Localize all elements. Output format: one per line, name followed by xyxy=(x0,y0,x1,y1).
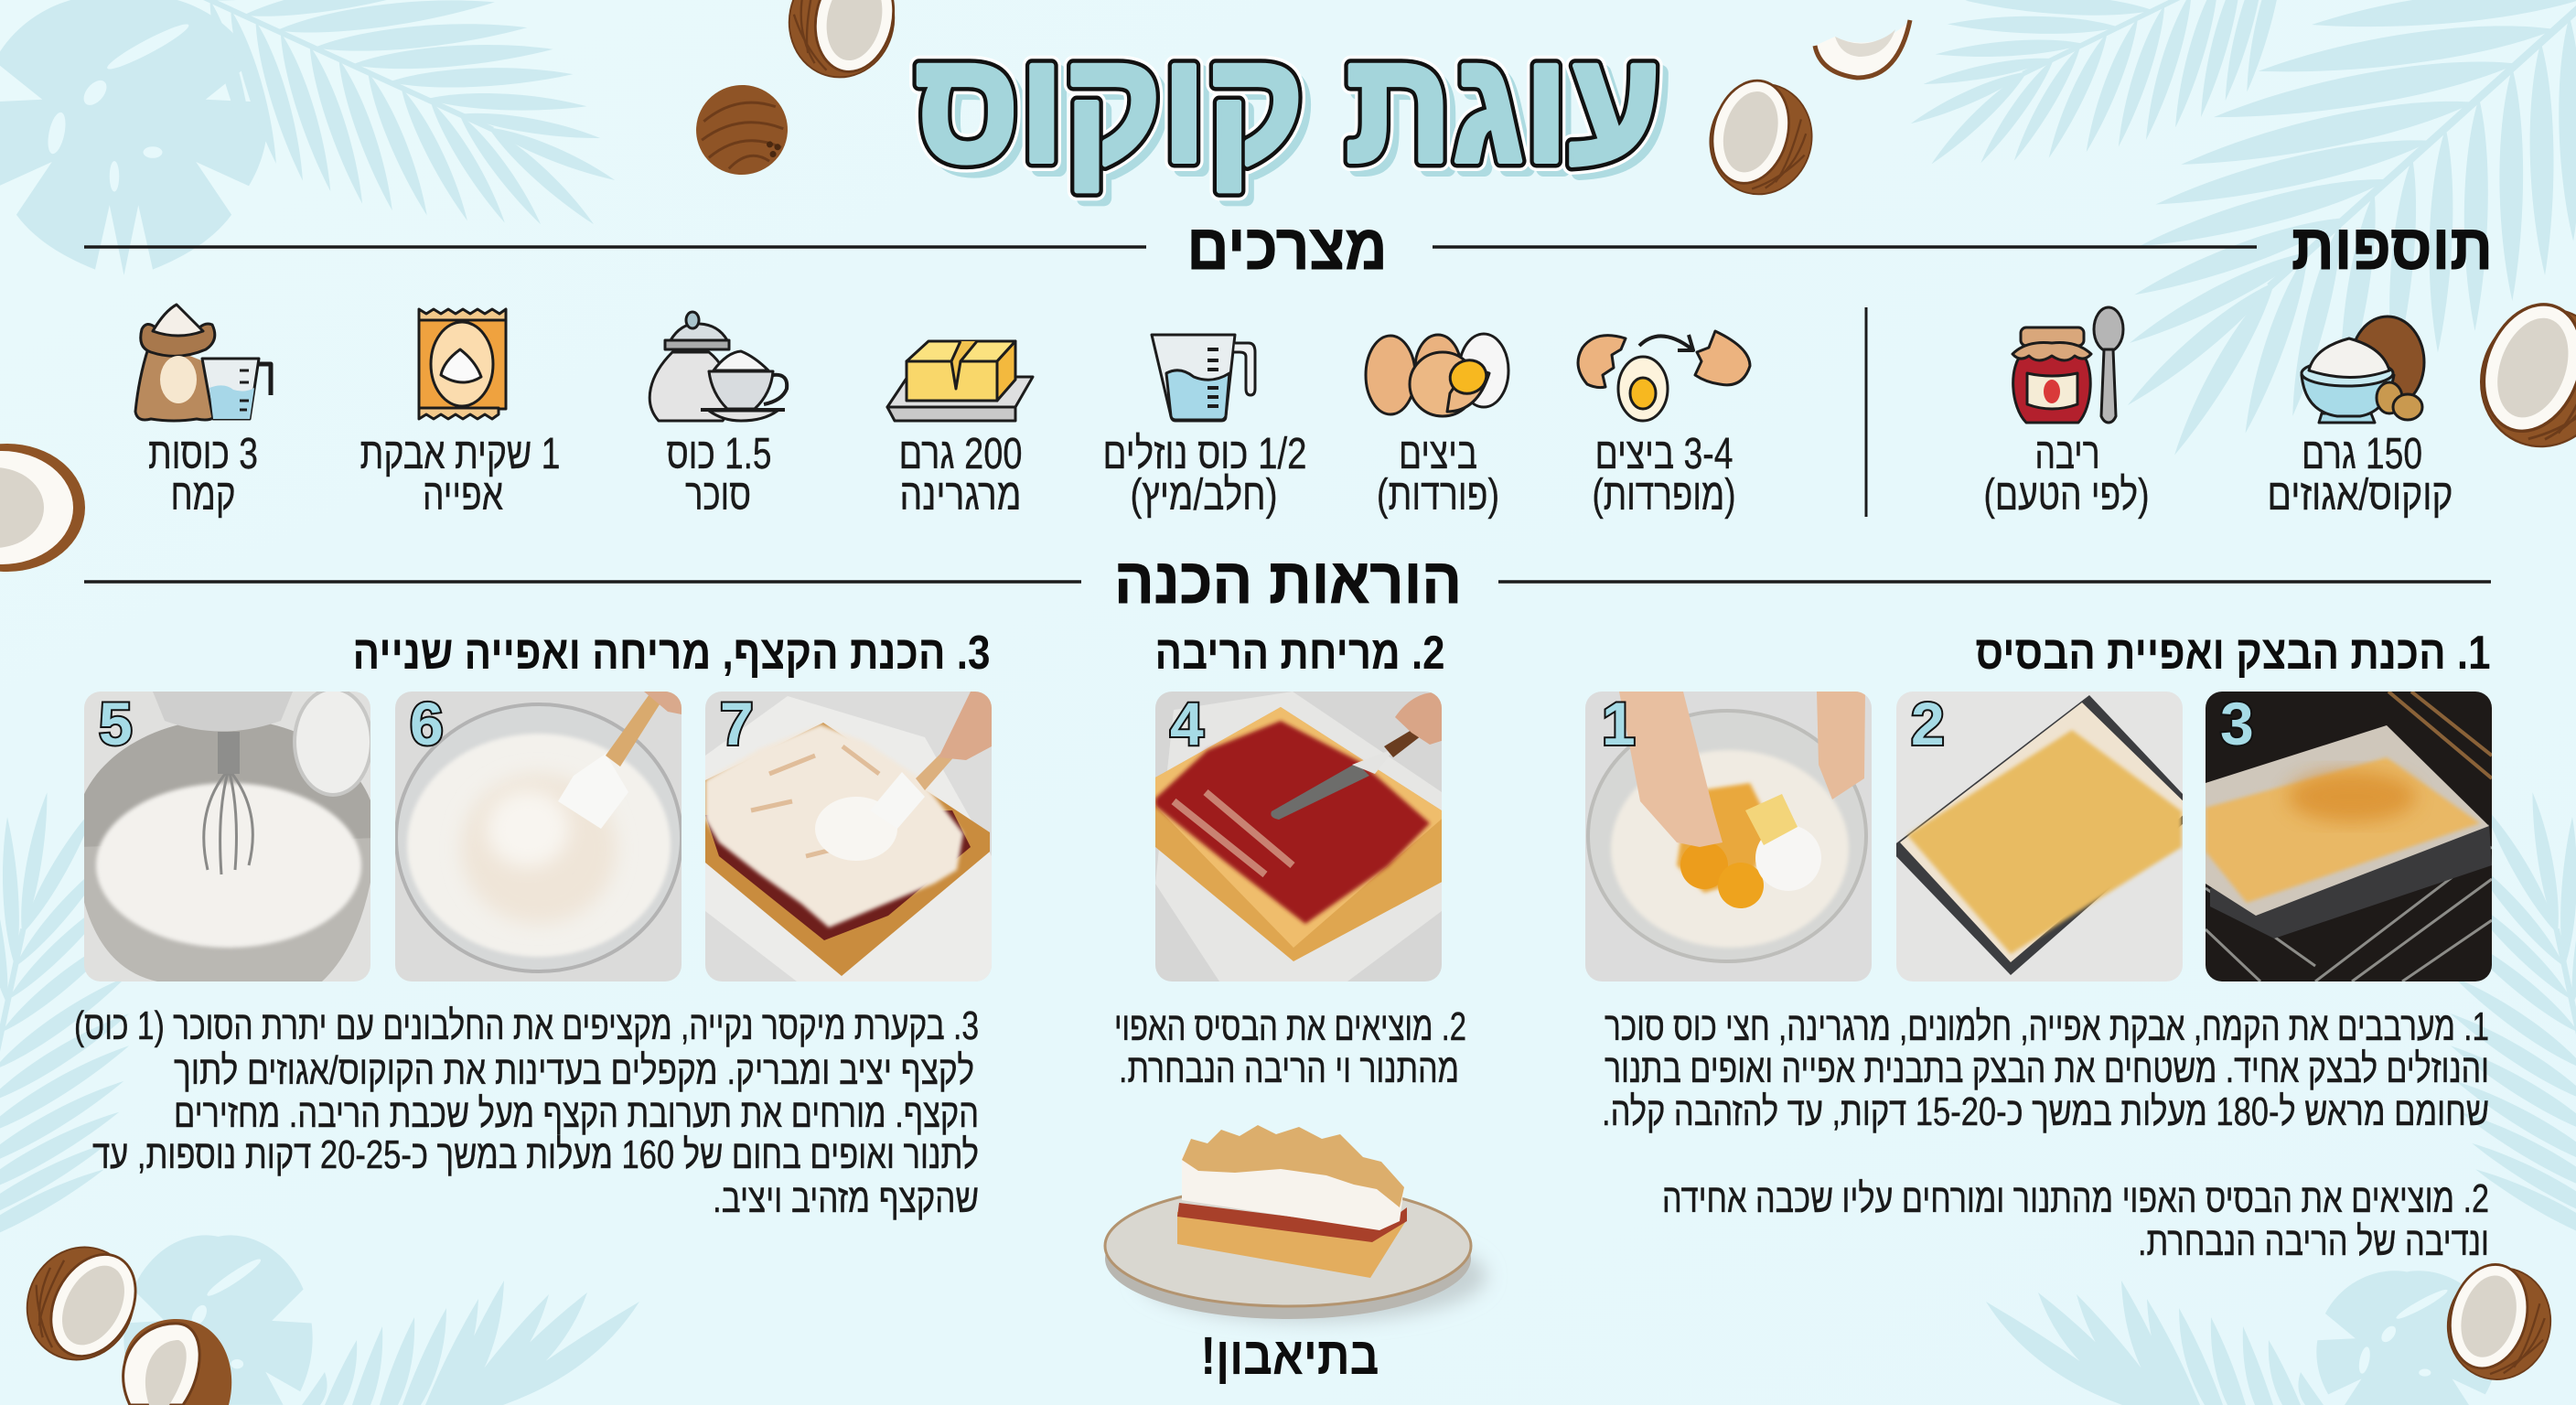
ingredient: baking powder: אפייה xyxy=(423,471,503,520)
title: עוגת קוקוס xyxy=(922,27,1669,202)
ingredient: whole eggs xyxy=(1366,334,1508,520)
ingredient: whole eggs: (פורדות) xyxy=(1377,471,1499,520)
photo 1: mixing the dough: 1 xyxy=(1602,690,1636,757)
photo 1: mixing the dough xyxy=(1585,690,1872,981)
ingredient: baking powder: 1 שקית אבקת xyxy=(360,430,560,478)
divider between extras and ingredients xyxy=(1864,307,1868,517)
photo 2: dough in the pan xyxy=(1889,690,2198,981)
icon: margarine on dish xyxy=(887,341,1033,421)
instructions: step 3 text: לקצף יציב ומבריק. מקפלים בעדינות את הקוקוס/אגוזים לתוך xyxy=(174,1048,974,1093)
ingredient: margarine xyxy=(887,341,1033,520)
extra: coconut or nuts: קוקוס/אגוזים xyxy=(2267,471,2453,520)
extra: jam xyxy=(1983,307,2150,520)
photo 7: spreading the meringue xyxy=(705,690,992,981)
step heading 2: 2. מריחת הריבה xyxy=(1154,627,1445,680)
ingredient: flour: קמח xyxy=(170,471,236,520)
instructions: step 2 text xyxy=(1114,1004,1466,1091)
photo 4: spreading the jam: 4 xyxy=(1170,690,1204,757)
ingredient: separated eggs: (מופרדות) xyxy=(1592,471,1736,520)
ingredient: separated eggs xyxy=(1578,331,1750,520)
ingredient: margarine: מרגרינה xyxy=(900,471,1021,520)
title: עוגת קוקוס xyxy=(915,19,1661,195)
extra: coconut or nuts: 150 גרם xyxy=(2302,430,2422,478)
instructions: step 1 text: שחומם מראש ל-180 מעלות במשך כ-15-20 דקות, עד להזהבה קלה. xyxy=(1602,1089,2489,1134)
section heading: extras: תוספות xyxy=(2292,211,2493,283)
ingredient: margarine: 200 גרם xyxy=(898,430,1023,478)
photo 7: spreading the meringue: 7 xyxy=(720,690,754,757)
instructions: step 2 text: מהתנור וי הריבה הנבחרת. xyxy=(1119,1046,1459,1091)
icon: jam jar and spoon xyxy=(2012,307,2123,423)
ingredient: baking powder xyxy=(360,309,560,520)
photo 6: folding in the coconut xyxy=(395,690,682,981)
photo 5: whipping the egg whites xyxy=(75,689,377,981)
photo 3: baking in the oven: 3 xyxy=(2220,690,2254,757)
instructions: step 3 text: שהקצף מזהיב ויציב. xyxy=(713,1176,979,1221)
closing text: בתיאבון! xyxy=(1200,1326,1379,1386)
ingredient: flour xyxy=(135,305,271,520)
photo 5: whipping the egg whites: 5 xyxy=(99,690,133,757)
photo 3: baking in the oven xyxy=(2206,690,2492,981)
photo: finished cake slice on plate xyxy=(1105,1125,1487,1322)
icon: sugar bowl and cup xyxy=(649,312,787,421)
section heading: preparation: הוראות הכנה xyxy=(1114,545,1462,617)
photo 2: dough in the pan: 2 xyxy=(1911,690,1945,757)
ingredient: sugar: 1.5 כוס xyxy=(666,430,772,478)
ingredient: flour: 3 כוסות xyxy=(148,430,258,478)
title: עוגת קוקוס xyxy=(915,19,1661,195)
instructions: step 3 text: הקצף. מורחים את תערובת הקצף מעל שכבת הריבה. מחזירים xyxy=(174,1091,979,1136)
instructions: step 1 text xyxy=(1602,1004,2489,1264)
ingredient: liquids: 1/2 כוס נוזלים xyxy=(1103,430,1306,478)
step heading 3: 3. הכנת הקצף, מריחה ואפייה שנייה xyxy=(353,627,990,680)
instructions: step 2 text: 2. מוציאים את הבסיס האפוי xyxy=(1114,1004,1466,1049)
ingredient: sugar xyxy=(649,312,787,520)
extra: coconut or nuts xyxy=(2267,316,2453,520)
ingredient: liquids: (חלב/מיץ) xyxy=(1131,471,1277,520)
icon: eggs and cracked egg xyxy=(1366,334,1508,416)
instructions: step 3 text: לתנור ואופים בחום של 160 מעלות במשך כ-20-25 דקות נוספות, עד xyxy=(92,1132,979,1177)
ingredient: whole eggs: ביצים xyxy=(1399,430,1477,478)
photo 4: spreading the jam xyxy=(1155,690,1447,981)
icon: baking powder sachet xyxy=(419,309,506,419)
icon: coconut bowl and nuts xyxy=(2302,316,2424,423)
section heading: ingredients: מצרכים xyxy=(1187,211,1387,283)
icon: separated egg shells and yolk xyxy=(1578,331,1750,421)
photo 6: folding in the coconut: 6 xyxy=(410,690,444,757)
instructions: step 1 text: ונדיבה של הריבה הנבחרת. xyxy=(2138,1219,2489,1264)
title: עוגת קוקוס xyxy=(915,19,1661,195)
extra: jam: ריבה xyxy=(2034,430,2100,478)
instructions: step 3 text xyxy=(74,1003,979,1221)
ingredient: sugar: סוכר xyxy=(685,471,751,520)
icon: measuring jug xyxy=(1152,335,1255,421)
instructions: step 3 text: 3. בקערת מיקסר נקייה, מקציפים את החלבונים עם יתרת הסוכר (1 כוס) xyxy=(74,1003,979,1048)
extra: jam: (לפי הטעם) xyxy=(1983,471,2150,520)
ingredient: separated eggs: 3-4 ביצים xyxy=(1595,430,1733,478)
ingredient: liquids xyxy=(1103,335,1306,520)
step heading 1: 1. הכנת הבצק ואפיית הבסיס xyxy=(1976,627,2490,680)
icon: flour bag and jug xyxy=(135,305,271,421)
